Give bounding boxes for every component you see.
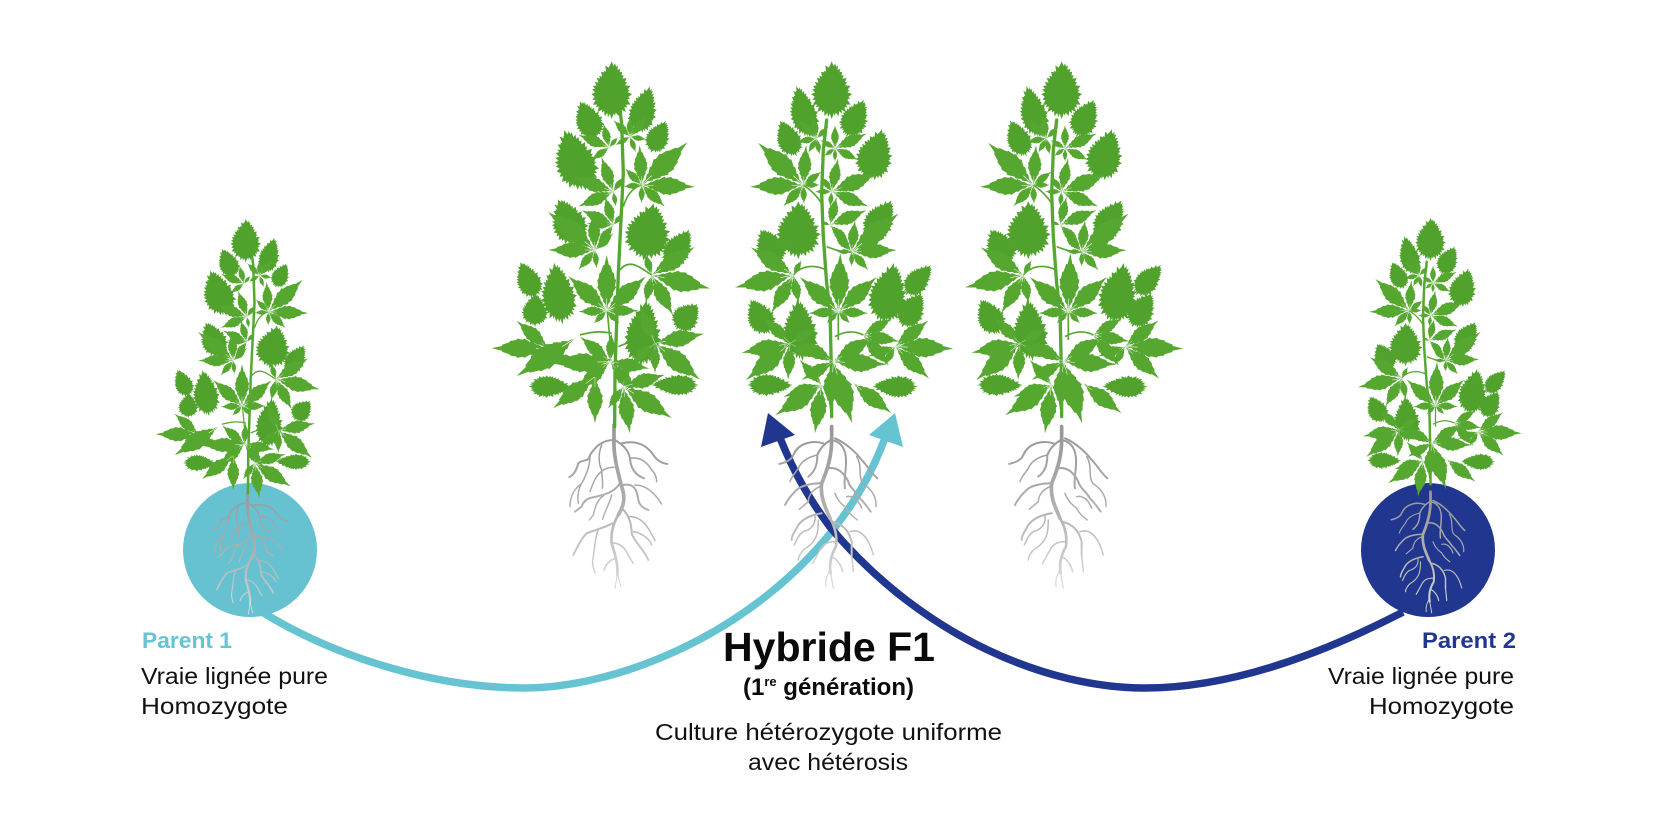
title: hybrid F1: Hybride F1 (723, 624, 935, 670)
plant: hybrid right (963, 59, 1184, 588)
description: Culture hétérozygote uniforme (655, 719, 1002, 745)
arrow: parent 1 to hybrid (262, 413, 903, 688)
plant: hybrid left (492, 59, 712, 588)
label: parent 1: Homozygote (141, 693, 288, 719)
description: avec hétérosis (748, 749, 908, 775)
label: parent 2: Homozygote (1369, 693, 1514, 719)
parent 1 circle (183, 483, 317, 617)
label: parent 2 (1328, 628, 1516, 719)
plant: parent 2 (1356, 216, 1522, 613)
label: parent 1: Vraie lignée pure (141, 663, 328, 689)
subtitle: first generation: re (764, 674, 777, 689)
label: parent 1 (141, 628, 328, 719)
description (655, 719, 1002, 775)
plant: parent 1 (156, 217, 321, 614)
label: parent 2: Parent 2 (1422, 628, 1516, 653)
subtitle: first generation: génération) (777, 674, 914, 701)
arrow: parent 2 to hybrid (761, 413, 1403, 688)
label: parent 2: Vraie lignée pure (1328, 663, 1514, 689)
label: parent 1: Parent 1 (142, 628, 232, 653)
parent 2 circle (1361, 483, 1495, 617)
plant: hybrid centre (733, 59, 954, 588)
subtitle: first generation: (1 (743, 674, 764, 701)
